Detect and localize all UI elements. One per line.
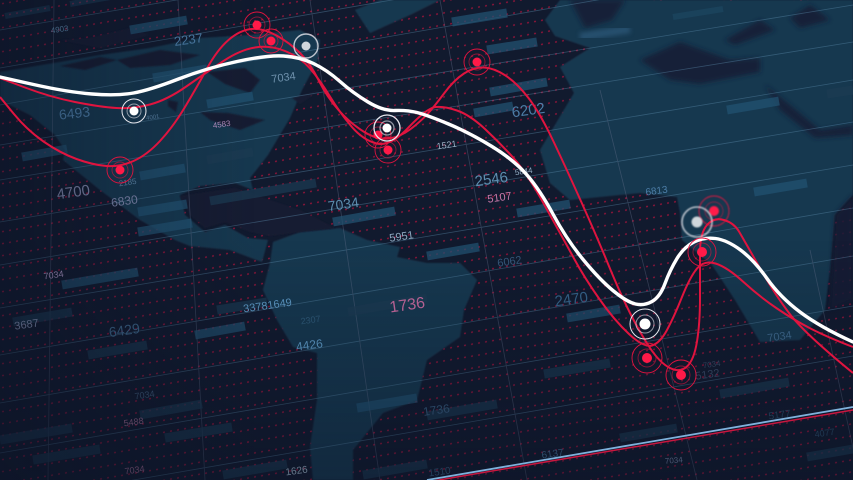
- marker: red Americas low: [107, 157, 133, 183]
- marker: red second peak: [259, 29, 283, 53]
- red trend line A: [0, 47, 853, 347]
- land: Africa and Eurasia: [540, 0, 853, 342]
- marker: red right peak: [699, 196, 729, 226]
- data number labels: 4077: [814, 427, 835, 439]
- data number labels: 5177: [768, 408, 792, 423]
- red data markers: [107, 12, 729, 390]
- data number labels: 7034: [271, 70, 297, 86]
- data number labels: 4001: [146, 114, 161, 122]
- marker: white right: [682, 207, 712, 237]
- data number labels: 2237: [173, 30, 204, 49]
- marker: red mid trough upper: [365, 122, 391, 148]
- data number labels: 7034: [327, 194, 360, 214]
- data number labels: 2307: [300, 314, 321, 326]
- map inland seas and islands: [60, 28, 335, 236]
- marker: white middle: [374, 115, 400, 141]
- marker: white low: [630, 309, 660, 339]
- data number labels: 6813: [645, 184, 669, 199]
- marker: red Atlantic peak: [464, 49, 490, 75]
- data number labels: 7034: [134, 389, 155, 401]
- data number labels: 6830: [110, 192, 139, 210]
- data number labels: 1736: [422, 401, 451, 419]
- data number labels: 4700: [56, 182, 91, 203]
- data number labels: 6062: [497, 254, 523, 270]
- baseline axis: [427, 407, 853, 480]
- data number labels: 5488: [123, 416, 144, 428]
- marker: white top: [294, 34, 318, 58]
- data number labels: 7034: [124, 464, 145, 476]
- white data markers: [122, 34, 712, 339]
- data number labels: 2470: [554, 289, 589, 310]
- land: North and Central America: [0, 30, 320, 262]
- marker: red mid trough lower: [375, 137, 401, 163]
- marker: red top peak: [244, 12, 270, 38]
- data number labels: 1521: [436, 139, 457, 151]
- marker: red low one: [632, 343, 662, 373]
- data number labels: 6202: [511, 100, 546, 121]
- blurred seas of Europe and Asia: [570, 0, 853, 310]
- data number labels: 5132: [695, 367, 721, 383]
- red trend line B: [0, 29, 853, 373]
- data number labels: 7034: [665, 455, 684, 466]
- data number labels: 2185: [118, 177, 138, 188]
- data number labels: 5844: [514, 166, 534, 177]
- land: South America: [263, 228, 477, 480]
- data number labels: 7034: [43, 269, 64, 281]
- data number labels: 6493: [58, 103, 91, 123]
- data number labels: 2546: [474, 169, 509, 190]
- data number labels: 4583: [212, 119, 232, 130]
- data number labels: 4426: [295, 336, 324, 354]
- data number labels: 1626: [285, 464, 309, 479]
- data number labels: 5107: [487, 190, 513, 206]
- data number labels: 33781649: [243, 297, 293, 315]
- marker: red low two: [666, 360, 696, 390]
- data number labels: 1736: [389, 295, 426, 316]
- data number labels: 6137: [541, 447, 565, 462]
- data number labels: 3687: [14, 317, 40, 333]
- data number labels: 7034: [702, 359, 722, 370]
- land: Greenland: [355, 0, 440, 33]
- white trend line: [0, 56, 853, 342]
- data number labels: 7034: [767, 329, 793, 345]
- data number labels: 4903: [50, 24, 70, 35]
- marker: red right shoulder: [688, 238, 716, 266]
- data number labels: 1510: [428, 465, 452, 480]
- data number labels: 6429: [108, 320, 141, 340]
- marker: white Americas: [122, 99, 146, 123]
- data number labels: 5951: [389, 229, 415, 245]
